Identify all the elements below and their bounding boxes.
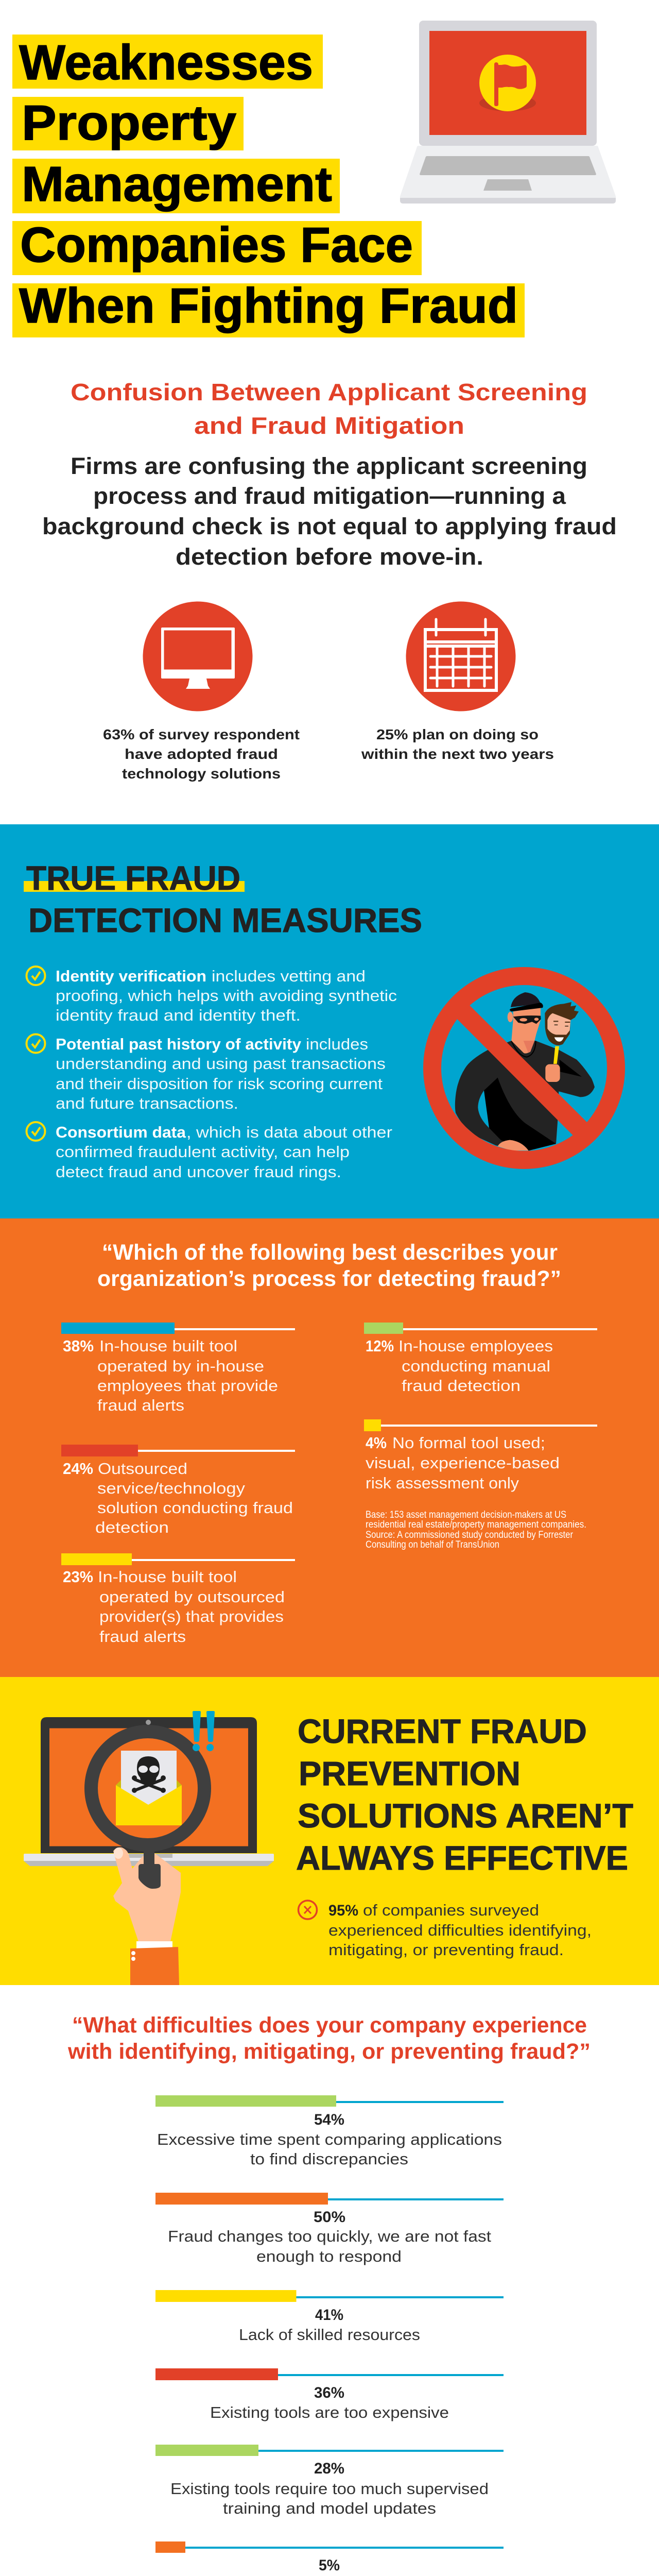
- text: identity verification: identity fraud and identity theft.: [56, 1006, 301, 1024]
- bar: 28%: training and model updates: [223, 2499, 436, 2517]
- bar: 38%: [61, 1323, 295, 1414]
- bar: 24%: 24%: [63, 1460, 93, 1478]
- icon: check history: [27, 1035, 45, 1053]
- heading: current fraud prevention solutions: [296, 1712, 633, 1877]
- stat: 63% adopted: [103, 726, 300, 782]
- text block: firms are confusing: [42, 453, 617, 570]
- bar: 23%: fraud alerts: [99, 1628, 186, 1646]
- icon: calendar: [406, 602, 516, 711]
- text block: firms are confusing: process and fraud mitigation—running a: [93, 483, 566, 509]
- bar: 4%: visual, experience-based: [366, 1454, 560, 1472]
- stat: 25% plan: within the next two years: [361, 746, 554, 762]
- heading: current fraud prevention solutions: PREVENTION: [299, 1754, 521, 1792]
- heading: true fraud detection measures: TRUE FRAUD: [26, 859, 240, 897]
- panel: true fraud detection measures: [0, 824, 659, 1218]
- stat: 25% plan: 25% plan on doing so: [376, 726, 539, 742]
- bar: 12%: 12%: [366, 1337, 394, 1355]
- heading: confusion between screening and mitigation: and Fraud Mitigation: [194, 412, 464, 439]
- bar: 23%: [61, 1553, 295, 1646]
- source note: Source: A commissioned study conducted by Forrester: [366, 1530, 574, 1540]
- heading: current fraud prevention solutions: ALWAYS EFFECTIVE: [296, 1839, 628, 1877]
- bar: 23%: operated by outsourced: [99, 1588, 285, 1606]
- bar: 50%: [155, 2193, 504, 2265]
- text: 95% of companies: mitigating, or preventing fraud.: [328, 1941, 564, 1959]
- heading: true fraud detection measures: [24, 859, 422, 939]
- bar: 5%: [155, 2541, 504, 2576]
- stat: 25% plan: [361, 726, 554, 762]
- bar: 54%: [155, 2095, 504, 2168]
- heading: organization process question: “Which of the following best describes your: [102, 1240, 558, 1265]
- bar: 12%: [364, 1323, 597, 1395]
- bar: 12%: In-house employees: [398, 1337, 553, 1355]
- text: consortium data: , which is data about other: [186, 1123, 392, 1141]
- bar: 28%: 28%: [314, 2460, 344, 2477]
- title: Companies Face: [20, 217, 413, 273]
- stat: 63% adopted: 63% of survey respondent: [103, 726, 300, 742]
- text: potential past history: [56, 1035, 386, 1112]
- text: potential past history: and future transactions.: [56, 1094, 238, 1112]
- text: identity verification: Identity verification: [56, 967, 206, 985]
- bar: 38%: fraud alerts: [97, 1396, 184, 1414]
- bar: 28%: Existing tools require too much supervised: [170, 2480, 489, 2498]
- bar: 24%: [61, 1445, 295, 1536]
- text: 95% of companies: experienced difficulties identifying,: [328, 1921, 592, 1939]
- bar: 12%: conducting manual: [402, 1357, 550, 1375]
- source note: Consulting on behalf of TransUnion: [366, 1539, 499, 1550]
- text block: firms are confusing: detection before move-in.: [176, 544, 483, 570]
- icon: check identity: [27, 967, 45, 985]
- bar: 41%: Lack of skilled resources: [239, 2326, 420, 2344]
- bar: 38%: employees that provide: [97, 1377, 278, 1395]
- title: When Fighting Fraud: [19, 278, 518, 333]
- bar: 12%: fraud detection: [402, 1377, 521, 1395]
- stat: 63% adopted: have adopted fraud: [125, 746, 278, 762]
- title: [12, 35, 525, 337]
- text: potential past history: and their disposition for risk scoring current: [56, 1075, 383, 1093]
- heading: confusion between screening and mitigation: [71, 379, 587, 439]
- bar: 24%: detection: [95, 1518, 169, 1536]
- bar: 50%: Fraud changes too quickly, we are not fast: [168, 2227, 491, 2245]
- bar: 36%: Existing tools are too expensive: [210, 2403, 449, 2421]
- text: potential past history: understanding and using past transactions: [56, 1055, 386, 1073]
- bar: 24%: solution conducting fraud: [97, 1499, 293, 1517]
- bar: 4%: No formal tool used;: [392, 1434, 545, 1452]
- bar: 4%: risk assessment only: [366, 1474, 519, 1492]
- title: Management: [22, 157, 332, 212]
- heading: what difficulties: “What difficulties does your company experience: [72, 2013, 587, 2038]
- text: 95% of companies: 95%: [328, 1902, 358, 1919]
- text: consortium data: confirmed fraudulent activity, can help: [56, 1143, 350, 1161]
- text: consortium data: detect fraud and uncover fraud rings.: [56, 1163, 341, 1181]
- bar: 36%: 36%: [314, 2384, 344, 2401]
- title: Property: [22, 95, 236, 150]
- bar: 54%: to find discrepancies: [250, 2150, 408, 2168]
- icon: check consortium: [27, 1122, 45, 1141]
- bar: 50%: 50%: [314, 2209, 345, 2226]
- heading: confusion between screening and mitigation: Confusion Between Applicant Screening: [71, 379, 587, 405]
- bar: 50%: enough to respond: [256, 2247, 402, 2265]
- bar: 28%: [155, 2445, 504, 2517]
- heading: current fraud prevention solutions: SOLUTIONS AREN’T: [298, 1797, 633, 1835]
- title: Weaknesses: [19, 35, 313, 90]
- icon: laptop with red flag: [400, 21, 616, 204]
- bar: 36%: [155, 2368, 504, 2421]
- text: 95% of companies: [328, 1901, 592, 1959]
- bar: 23%: In-house built tool: [98, 1568, 237, 1586]
- panel: current fraud prevention: [0, 1677, 659, 1985]
- text: identity verification: proofing, which helps with avoiding synthetic: [56, 987, 397, 1005]
- heading: organization process question: organization’s process for detecting fraud?”: [97, 1266, 561, 1291]
- bar: 24%: service/technology: [97, 1479, 246, 1497]
- heading: true fraud detection measures: DETECTION MEASURES: [28, 901, 422, 939]
- bar: 54%: 54%: [314, 2111, 344, 2128]
- text block: firms are confusing: background check is not equal to applying fraud: [42, 513, 617, 539]
- heading: organization process question: [97, 1240, 561, 1291]
- bar: 4%: [364, 1419, 597, 1492]
- text: consortium data: [56, 1123, 392, 1181]
- icon: x in circle: [299, 1901, 317, 1919]
- bar: 23%: 23%: [63, 1568, 93, 1586]
- heading: what difficulties: [67, 2013, 591, 2064]
- bar: 24%: Outsourced: [98, 1460, 187, 1478]
- bar: 5%: 5%: [319, 2557, 340, 2574]
- icon: thief with mask in prohibition sign: [432, 976, 616, 1160]
- text: potential past history: Potential past history of activity: [56, 1035, 302, 1053]
- bar: 38%: operated by in-house: [97, 1357, 264, 1375]
- bar: 38%: 38%: [63, 1337, 94, 1355]
- bar: 41%: [155, 2290, 504, 2344]
- text: identity verification: [56, 967, 397, 1024]
- bar: 23%: provider(s) that provides: [99, 1607, 284, 1625]
- bar: 38%: In-house built tool: [99, 1337, 237, 1355]
- bar: 54%: Excessive time spent comparing applications: [157, 2130, 502, 2148]
- source note: Base: 153 asset management decision-makers at US: [366, 1510, 566, 1520]
- source note: residential real estate/property management companies.: [366, 1519, 586, 1530]
- text: identity verification: includes vetting and: [212, 967, 366, 985]
- source note: [366, 1510, 586, 1550]
- chart: difficulties: [155, 2095, 504, 2576]
- stat: 63% adopted: technology solutions: [122, 766, 281, 782]
- text: potential past history: includes: [306, 1035, 368, 1053]
- panel: which process for detecting fraud: [0, 1218, 659, 1677]
- text: consortium data: Consortium data: [56, 1123, 186, 1141]
- icon: monitor: [143, 602, 252, 711]
- heading: current fraud prevention solutions: CURRENT FRAUD: [298, 1712, 587, 1750]
- icon: laptop with magnifier over poison email: [24, 1711, 274, 1985]
- heading: what difficulties: with identifying, mitigating, or preventing fraud?”: [67, 2039, 591, 2064]
- text: 95% of companies: of companies surveyed: [363, 1901, 539, 1919]
- text block: firms are confusing: Firms are confusing the applicant screening: [71, 453, 587, 479]
- bar: 4%: 4%: [366, 1434, 387, 1452]
- bar: 41%: 41%: [315, 2307, 343, 2324]
